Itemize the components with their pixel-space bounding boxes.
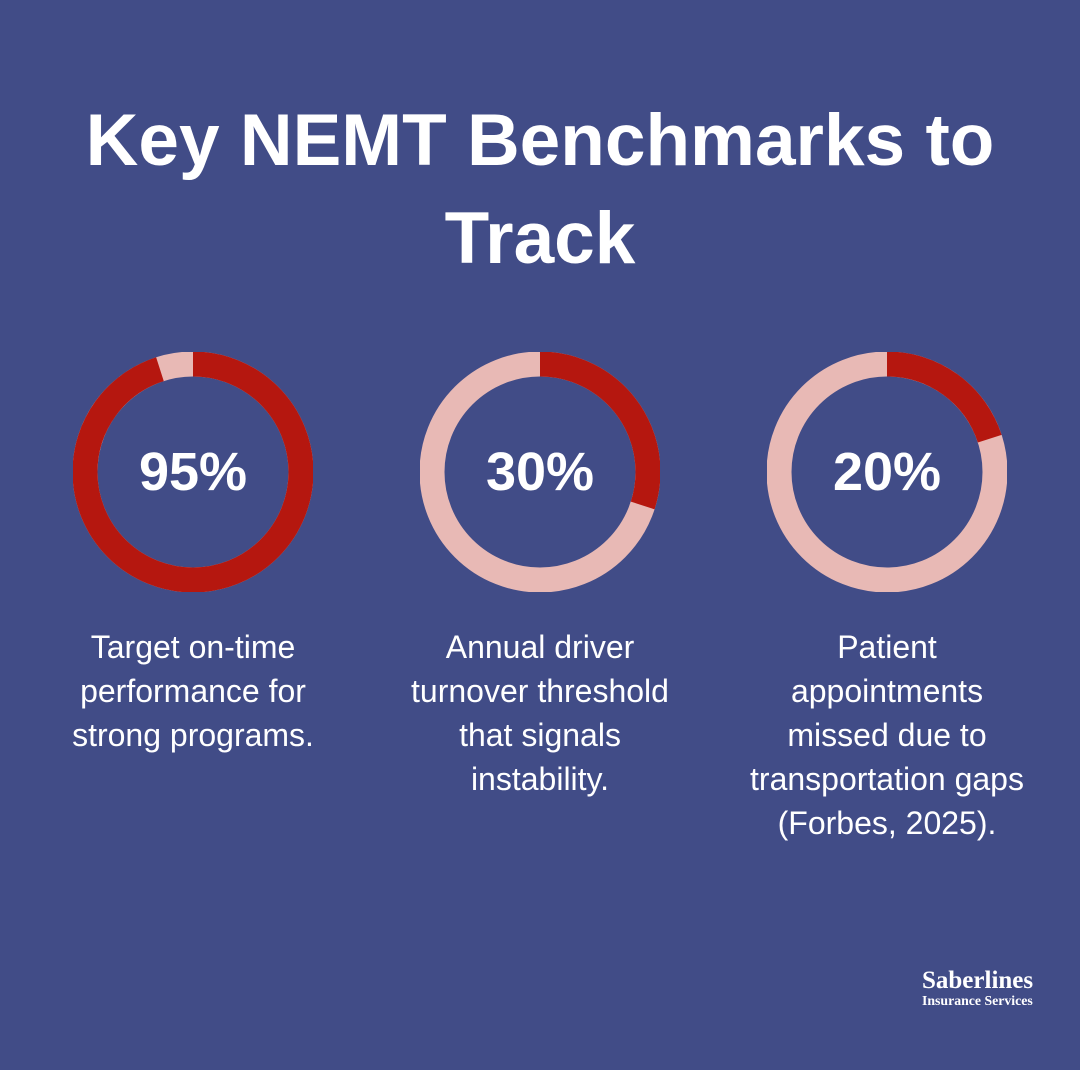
text: 20% description: missed due to — [787, 717, 987, 753]
text: 95% description: strong programs. — [72, 717, 314, 753]
text: 95% description — [72, 629, 314, 753]
text: 30% description: that signals — [459, 717, 621, 753]
text: 30% — [486, 442, 594, 502]
logo: Insurance Services — [922, 993, 1033, 1008]
text: 30% description: instability. — [471, 761, 609, 797]
stat: 30% donut — [420, 352, 660, 592]
text: 95% description: performance for — [80, 673, 306, 709]
text: 20% description: transportation gaps — [750, 761, 1024, 797]
logo: Saberlines — [922, 967, 1033, 994]
logo — [922, 967, 1033, 1008]
title — [86, 100, 994, 279]
text: 20% — [833, 442, 941, 502]
text: 95% description: Target on-time — [91, 629, 295, 665]
text: 30% description — [411, 629, 669, 797]
text: 30% description: Annual driver — [446, 629, 634, 665]
text: 20% description: appointments — [791, 673, 983, 709]
text: 20% description: Patient — [837, 629, 937, 665]
text: 95% — [139, 442, 247, 502]
title: Key NEMT Benchmarks to — [86, 100, 994, 181]
stat: 95% donut — [73, 352, 313, 592]
title: Track — [445, 198, 635, 279]
text: 20% description: (Forbes, 2025). — [778, 805, 996, 841]
stat: 20% donut — [767, 352, 1007, 592]
text: 20% description — [750, 629, 1024, 841]
text: 30% description: turnover threshold — [411, 673, 669, 709]
